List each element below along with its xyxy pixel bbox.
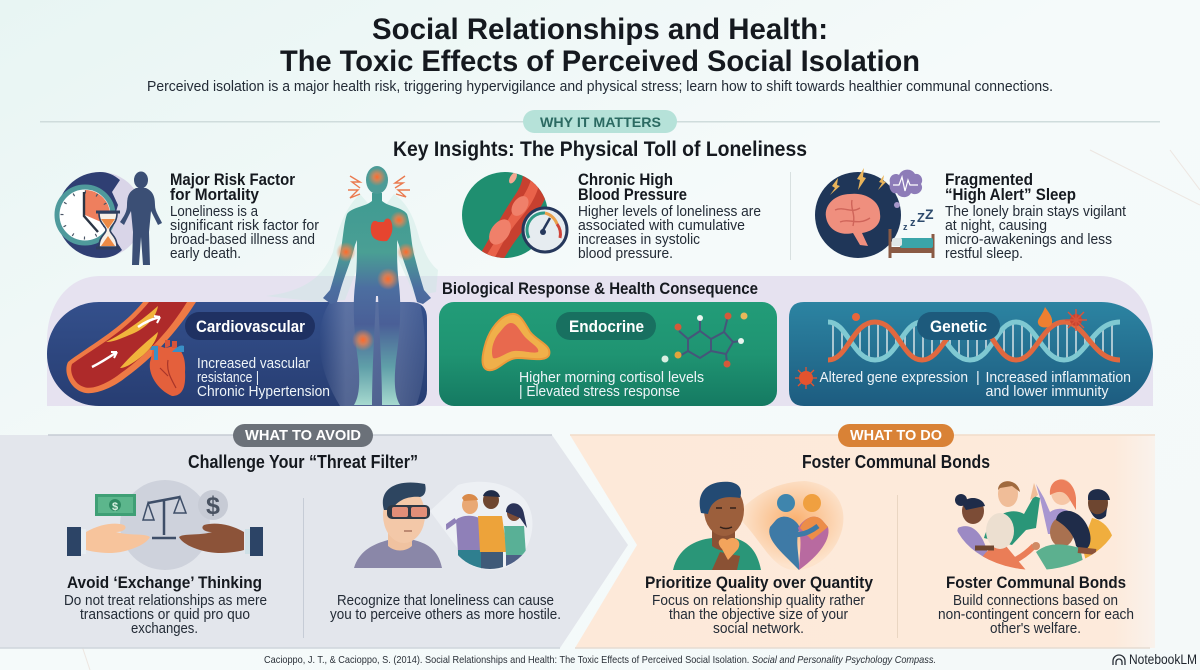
icon: brain and sleep bbox=[815, 168, 934, 258]
heading: foster communal bonds card: Foster Communal Bonds bbox=[946, 573, 1126, 592]
text: blood pressure description: increases in systolic bbox=[578, 232, 700, 248]
icon: brain and sleep: z bbox=[903, 222, 908, 232]
text: sleep description: The lonely brain stays vigilant bbox=[945, 204, 1126, 220]
label: endocrine bbox=[556, 312, 656, 340]
heading: chronic high blood pressure: Blood Pressure bbox=[578, 185, 687, 204]
panel: what to avoid bbox=[0, 424, 628, 648]
text: endocrine effects: | Elevated stress response bbox=[519, 384, 680, 400]
icon: flame and damage burst bbox=[852, 307, 1087, 331]
icon: clock and silhouette bbox=[57, 172, 162, 265]
text: quality description: than the objective size of your bbox=[669, 607, 848, 623]
icon: brain and sleep: z bbox=[910, 217, 916, 229]
text: communal description bbox=[938, 593, 1134, 637]
title: The Toxic Effects of Perceived Social Isolation bbox=[280, 45, 920, 78]
text: blood pressure description bbox=[578, 204, 761, 262]
icon: heart bbox=[150, 340, 185, 396]
heading: major risk factor: Major Risk Factor bbox=[170, 170, 295, 189]
text: mortality description: broad-based illness and bbox=[170, 232, 315, 248]
text: cardiovascular effects bbox=[197, 356, 330, 400]
panel: biological response band bbox=[47, 276, 1153, 406]
text: mortality description: significant risk factor for bbox=[170, 218, 319, 234]
text: sleep description bbox=[945, 204, 1126, 262]
label: genetic bbox=[917, 312, 1000, 340]
text: sleep description: restful sleep. bbox=[945, 246, 1023, 262]
icon: brain and sleep: Z bbox=[917, 210, 925, 225]
card: quality over quantity bbox=[645, 481, 873, 637]
panel: cardiovascular bbox=[47, 302, 427, 406]
heading: major risk factor bbox=[170, 170, 295, 204]
text: hostile perception description: Recognize that loneliness can cause bbox=[337, 593, 554, 609]
icon: man with heart and embracing figures bbox=[673, 481, 843, 570]
text: communal description: other's welfare. bbox=[990, 621, 1081, 637]
insight: blood pressure bbox=[462, 172, 760, 261]
text: mortality description: early death. bbox=[170, 246, 241, 262]
badge: what to avoid bbox=[233, 424, 373, 447]
text: quality description: Focus on relationship quality rather bbox=[652, 593, 865, 609]
badge: why it matters: WHY IT MATTERS bbox=[540, 114, 661, 130]
text: blood pressure description: associated with cumulative bbox=[578, 218, 745, 234]
stress glows bbox=[336, 168, 415, 351]
heading: biological response: Biological Response & Health Consequence bbox=[442, 280, 758, 298]
heading: quality over quantity: Prioritize Quality over Quantity bbox=[645, 573, 873, 592]
icon: man with threat-filter visor viewing others bbox=[354, 482, 532, 572]
text: endocrine effects: Higher morning cortisol levels bbox=[519, 370, 704, 386]
title bbox=[280, 13, 920, 78]
heading: avoid exchange thinking: Avoid ‘Exchange’ Thinking bbox=[67, 573, 262, 592]
icon: brain and sleep: Z bbox=[925, 206, 934, 222]
heading: fragmented sleep: Fragmented bbox=[945, 170, 1033, 189]
text: cardiovascular effects: resistance | bbox=[197, 370, 259, 386]
text: exchange description: Do not treat relationships as mere bbox=[64, 593, 267, 609]
heading: foster communal bonds: Foster Communal Bonds bbox=[802, 452, 990, 472]
icon: adrenal gland bbox=[482, 314, 549, 370]
label: genetic: Genetic bbox=[930, 317, 987, 336]
text: communal description: Build connections based on bbox=[953, 593, 1118, 609]
body silhouette bbox=[323, 193, 431, 405]
text: genetic effects: and lower immunity bbox=[986, 384, 1109, 400]
icon: scales, money and hands: $ bbox=[206, 492, 220, 520]
card: hostile perception bbox=[330, 482, 561, 623]
icon: cortisol molecule bbox=[662, 312, 748, 368]
text: genetic effects: Altered gene expression bbox=[820, 370, 968, 386]
alarm sparks bbox=[348, 176, 410, 198]
text: quality description: social network. bbox=[713, 621, 804, 637]
badge: what to do: WHAT TO DO bbox=[850, 427, 942, 444]
text: blood pressure description: Higher levels of loneliness are bbox=[578, 204, 761, 220]
text: communal description: non-contingent concern for each bbox=[938, 607, 1134, 623]
icon: group of six people bbox=[955, 479, 1116, 575]
icon: artery and gauge bbox=[462, 172, 568, 258]
label: cardiovascular bbox=[185, 312, 315, 340]
insight: sleep bbox=[815, 168, 1126, 262]
text: hostile perception description bbox=[330, 593, 561, 623]
citation: Cacioppo, J. T., & Cacioppo, S. (2014). Social Relationships and Health: The Toxic Effects of Perceived Social Isolation. Social and Personality Psychology Compass. bbox=[264, 654, 936, 666]
text: cardiovascular effects: Chronic Hypertension bbox=[197, 384, 330, 400]
icon: scales, money and hands: $ bbox=[112, 501, 118, 513]
icon: virus bbox=[795, 367, 817, 389]
icon: scales, money and hands bbox=[67, 480, 263, 570]
heading: key insights: Key Insights: The Physical Toll of Loneliness bbox=[393, 138, 807, 161]
heading: chronic high blood pressure: Chronic High bbox=[578, 170, 673, 189]
card: communal bonds bbox=[938, 479, 1134, 637]
text: hostile perception description: you to perceive others as more hostile. bbox=[330, 607, 561, 623]
badge: what to avoid: WHAT TO AVOID bbox=[245, 427, 361, 444]
text: genetic effects: Increased inflammation bbox=[986, 370, 1131, 386]
title: Social Relationships and Health: bbox=[372, 13, 828, 46]
panel: endocrine bbox=[439, 302, 777, 406]
text: mortality description bbox=[170, 204, 319, 262]
text: mortality description: Loneliness is a bbox=[170, 204, 259, 220]
label: endocrine: Endocrine bbox=[569, 317, 644, 336]
heart bbox=[371, 218, 392, 241]
badge: what to do bbox=[838, 424, 954, 447]
heading: fragmented sleep bbox=[945, 170, 1076, 204]
icon: narrowed artery bbox=[66, 302, 196, 393]
text: quality description bbox=[652, 593, 865, 637]
heading: threat filter: Challenge Your “Threat Filter” bbox=[188, 452, 418, 472]
heading: chronic high blood pressure bbox=[578, 170, 687, 204]
text: exchange description bbox=[64, 593, 267, 637]
text: endocrine effects bbox=[519, 370, 704, 400]
label: cardiovascular: Cardiovascular bbox=[196, 317, 305, 336]
panel: what to do bbox=[570, 424, 1155, 648]
panel: genetic bbox=[789, 302, 1153, 406]
text: blood pressure description: blood pressure. bbox=[578, 246, 673, 262]
badge: why it matters bbox=[523, 110, 677, 133]
insight: mortality bbox=[57, 170, 319, 265]
text: cardiovascular effects: Increased vascular bbox=[197, 356, 310, 372]
heading: fragmented sleep: “High Alert” Sleep bbox=[945, 185, 1076, 204]
text: genetic effects: | bbox=[976, 370, 980, 386]
subtitle: Perceived isolation is a major health risk, triggering hypervigilance and physical stress; learn how to shift towards healthier communal connections. bbox=[147, 79, 1053, 95]
head bbox=[366, 166, 388, 194]
icon: DNA helix bbox=[828, 322, 1120, 360]
text: genetic effects bbox=[820, 370, 1131, 400]
text: exchange description: exchanges. bbox=[131, 621, 198, 637]
card: exchange thinking bbox=[64, 480, 267, 637]
heading: major risk factor: for Mortality bbox=[170, 185, 259, 204]
aura bbox=[266, 194, 438, 406]
text: sleep description: micro-awakenings and less bbox=[945, 232, 1112, 248]
figure: human body with stress points bbox=[266, 166, 438, 406]
text: sleep description: at night, causing bbox=[945, 218, 1047, 234]
text: exchange description: transactions or quid pro quo bbox=[80, 607, 250, 623]
